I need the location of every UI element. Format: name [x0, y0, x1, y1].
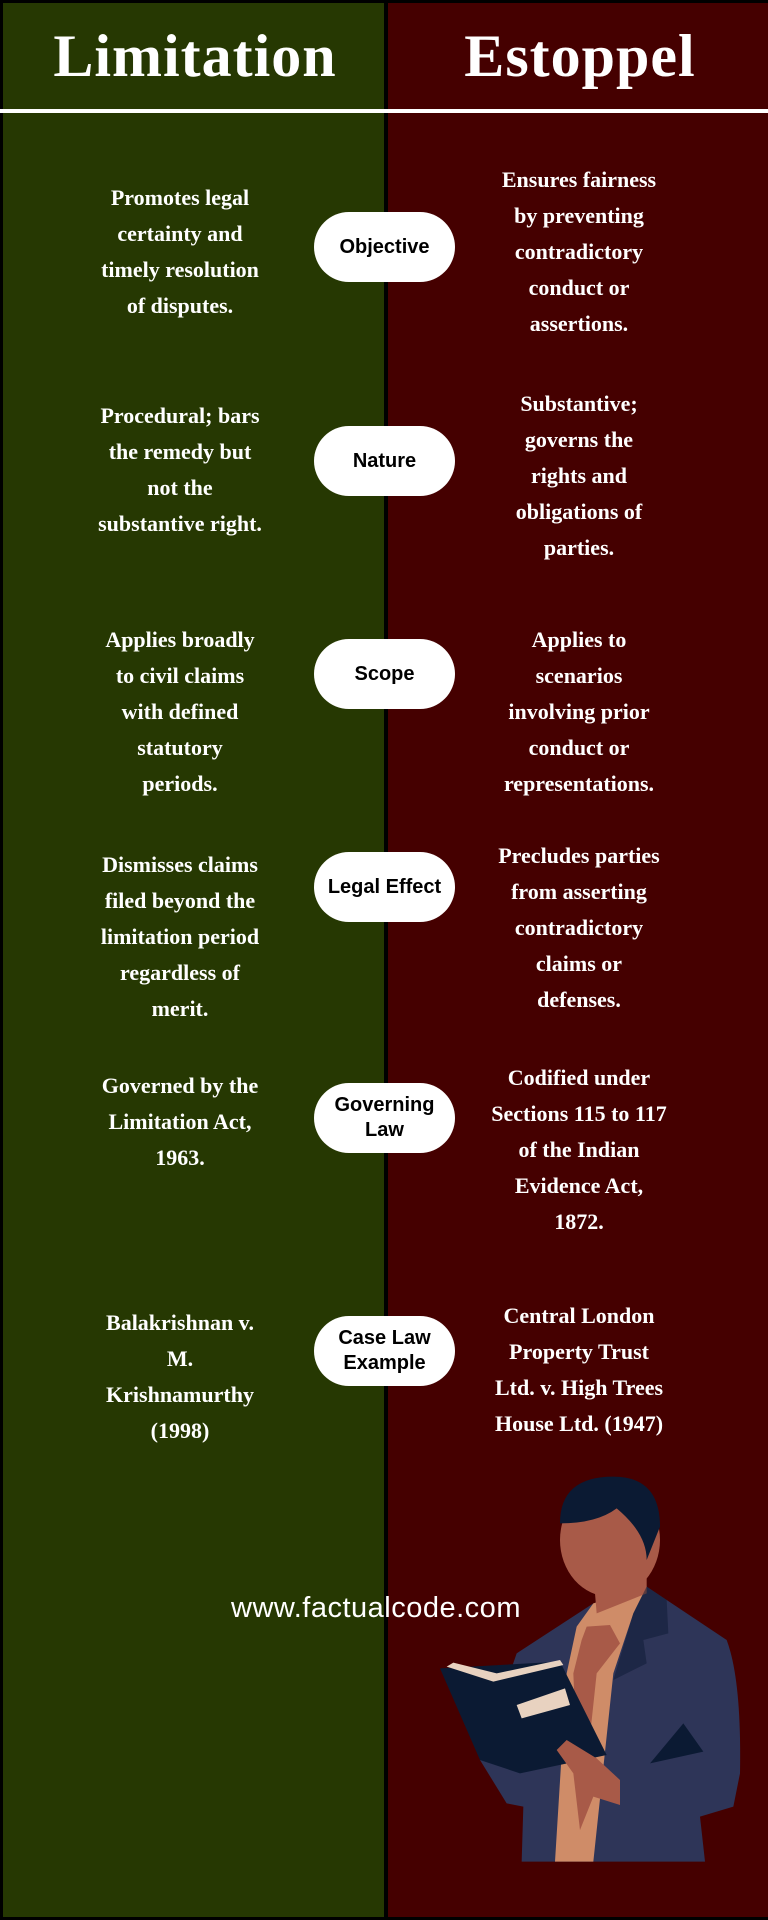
text: case law estoppel: House Ltd. (1947): [495, 1411, 663, 1436]
text: nature limitation: the remedy but: [109, 439, 251, 464]
text: governing law limitation: [102, 1073, 258, 1170]
text: nature estoppel: rights and: [531, 463, 627, 488]
text: legal effect estoppel: contradictory: [515, 915, 643, 940]
pill: Governing Law: Governing: [334, 1094, 434, 1116]
pill: Scope: [314, 639, 455, 709]
text: governing law limitation: Governed by the: [102, 1073, 258, 1098]
text: nature limitation: [98, 403, 262, 536]
pill: Legal Effect: Legal Effect: [328, 876, 441, 898]
text: legal effect estoppel: defenses.: [537, 987, 621, 1012]
text: objective estoppel: assertions.: [530, 311, 628, 336]
text: scope limitation: to civil claims: [116, 663, 244, 688]
text: governing law estoppel: Codified under: [508, 1065, 650, 1090]
panel: limitation column: [3, 3, 384, 1917]
text: nature estoppel: Substantive;: [520, 391, 638, 416]
text: governing law estoppel: of the Indian: [518, 1137, 640, 1162]
text: governing law estoppel: 1872.: [554, 1209, 604, 1234]
text: scope estoppel: scenarios: [536, 663, 622, 688]
pill: Scope: Scope: [354, 662, 415, 684]
text: objective estoppel: Ensures fairness: [502, 167, 656, 192]
text: objective estoppel: [502, 167, 656, 336]
text: scope limitation: with defined: [122, 699, 238, 724]
text: case law limitation: Krishnamurthy: [106, 1382, 254, 1407]
pill: Objective: [314, 212, 455, 282]
pill: Nature: [314, 426, 455, 496]
text: legal effect limitation: limitation period: [101, 924, 259, 949]
text: scope estoppel: involving prior: [508, 699, 650, 724]
title: Estoppel: Estoppel: [464, 23, 696, 89]
text: objective limitation: timely resolution: [101, 257, 259, 282]
text: objective limitation: Promotes legal: [111, 185, 249, 210]
text: scope estoppel: [504, 627, 654, 796]
text: nature estoppel: obligations of: [516, 499, 642, 524]
text: scope limitation: Applies broadly: [105, 627, 255, 652]
text: case law limitation: Balakrishnan v.: [106, 1310, 254, 1335]
text: governing law limitation: Limitation Act,: [108, 1109, 252, 1134]
text: scope estoppel: Applies to: [532, 627, 626, 652]
pill: Case Law Example: [314, 1316, 455, 1386]
text: legal effect limitation: merit.: [152, 996, 208, 1021]
pill: Governing Law: Law: [365, 1119, 404, 1141]
text: legal effect estoppel: Precludes parties: [498, 843, 660, 868]
text: nature estoppel: parties.: [544, 535, 614, 560]
text: objective estoppel: by preventing: [514, 203, 644, 228]
text: nature limitation: Procedural; bars: [100, 403, 260, 428]
title: Limitation: Limitation: [53, 23, 337, 89]
text: scope estoppel: conduct or: [529, 735, 629, 760]
text: case law estoppel: Ltd. v. High Trees: [495, 1375, 663, 1400]
text: governing law estoppel: Evidence Act,: [515, 1173, 643, 1198]
text: legal effect limitation: [101, 852, 259, 1021]
text: case law limitation: (1998): [151, 1418, 209, 1443]
website url: www.factualcode.com: [231, 1592, 521, 1624]
pill: Case Law Example: Example: [343, 1352, 426, 1374]
illustration: man reading book: [440, 1476, 740, 1862]
text: case law estoppel: Property Trust: [509, 1339, 649, 1364]
text: legal effect limitation: regardless of: [120, 960, 240, 985]
text: scope limitation: [105, 627, 255, 796]
pill: Nature: Nature: [353, 450, 416, 472]
text: governing law limitation: 1963.: [155, 1145, 205, 1170]
pill: Legal Effect: [314, 852, 455, 922]
text: legal effect estoppel: [498, 843, 660, 1012]
text: nature limitation: not the: [147, 475, 213, 500]
text: governing law estoppel: [491, 1065, 667, 1234]
text: scope limitation: periods.: [142, 771, 218, 796]
text: nature limitation: substantive right.: [98, 511, 262, 536]
text: objective estoppel: conduct or: [529, 275, 629, 300]
text: scope estoppel: representations.: [504, 771, 654, 796]
text: scope limitation: statutory: [137, 735, 223, 760]
text: case law limitation: [106, 1310, 254, 1443]
text: legal effect limitation: filed beyond the: [105, 888, 255, 913]
text: governing law estoppel: Sections 115 to 117: [491, 1101, 667, 1126]
text: case law estoppel: Central London: [504, 1303, 654, 1328]
text: case law limitation: M.: [167, 1346, 193, 1371]
pill: Governing Law: [314, 1083, 455, 1153]
pill: Case Law Example: Case Law: [338, 1327, 431, 1349]
pill: Objective: Objective: [339, 236, 430, 258]
panel: estoppel column: [388, 3, 768, 1917]
text: objective estoppel: contradictory: [515, 239, 643, 264]
text: legal effect estoppel: from asserting: [511, 879, 647, 904]
text: case law estoppel: [495, 1303, 663, 1436]
text: legal effect estoppel: claims or: [536, 951, 622, 976]
text: objective limitation: certainty and: [117, 221, 243, 246]
text: nature estoppel: governs the: [525, 427, 633, 452]
text: objective limitation: [101, 185, 259, 318]
text: legal effect limitation: Dismisses claims: [102, 852, 258, 877]
text: objective limitation: of disputes.: [127, 293, 233, 318]
text: nature estoppel: [516, 391, 642, 560]
